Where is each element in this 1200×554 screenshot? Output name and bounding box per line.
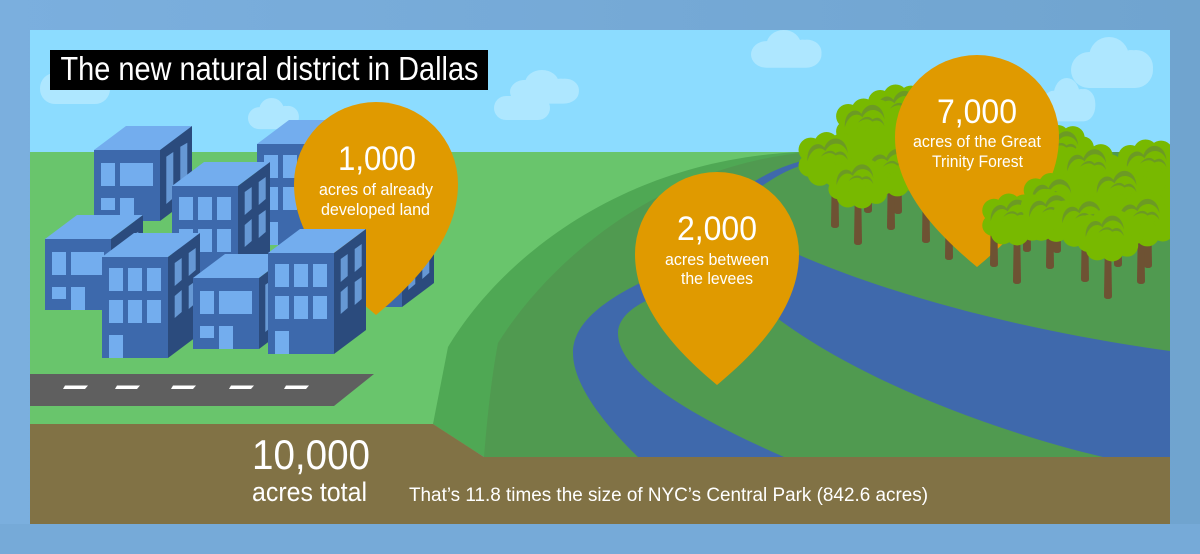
pin: 1,000 acres: [294, 102, 458, 315]
pin: 7,000 acres: acres of the Great: [913, 132, 1041, 151]
forest: front trees: [982, 173, 1175, 299]
pin: 1,000 acres: acres of already: [319, 180, 433, 199]
title: The new natural district in Dallas: [60, 50, 478, 87]
building: back centre: [257, 120, 325, 245]
meadow: [30, 152, 798, 452]
pin: 2,000 acres: [635, 172, 799, 385]
building: back right: [366, 254, 434, 307]
ground section: [30, 424, 1170, 524]
pin: 7,000 acres: 7,000: [937, 93, 1017, 131]
pin: 7,000 acres: [895, 55, 1059, 267]
comparison note: That’s 11.8 times the size of NYC’s Central Park (842.6 acres): [409, 485, 928, 506]
pin: 1,000 acres: 1,000: [338, 140, 416, 178]
total acres figure: 10,000: [252, 431, 370, 478]
pin: 1,000 acres: developed land: [321, 200, 430, 219]
sky: [30, 30, 1170, 152]
inner levee ground: [484, 152, 1170, 457]
total acres figure: acres total: [252, 477, 367, 507]
building: front centre: [193, 254, 268, 349]
road: [30, 374, 374, 406]
building: middle: [172, 162, 270, 273]
building: front left: [102, 233, 200, 358]
pin: 2,000 acres: the levees: [681, 269, 753, 288]
outer levee slope: [433, 152, 799, 457]
forest: back trees: [799, 84, 1190, 268]
building: far left: [45, 215, 143, 310]
pin: 2,000 acres: acres between: [665, 250, 769, 269]
building: front right: [268, 229, 366, 354]
total acres figure: [252, 431, 370, 507]
river: [573, 160, 1170, 457]
building: back left: [94, 126, 192, 221]
clouds: [40, 30, 1153, 129]
pin: 2,000 acres: 2,000: [677, 210, 757, 248]
pin: 7,000 acres: Trinity Forest: [932, 152, 1023, 171]
